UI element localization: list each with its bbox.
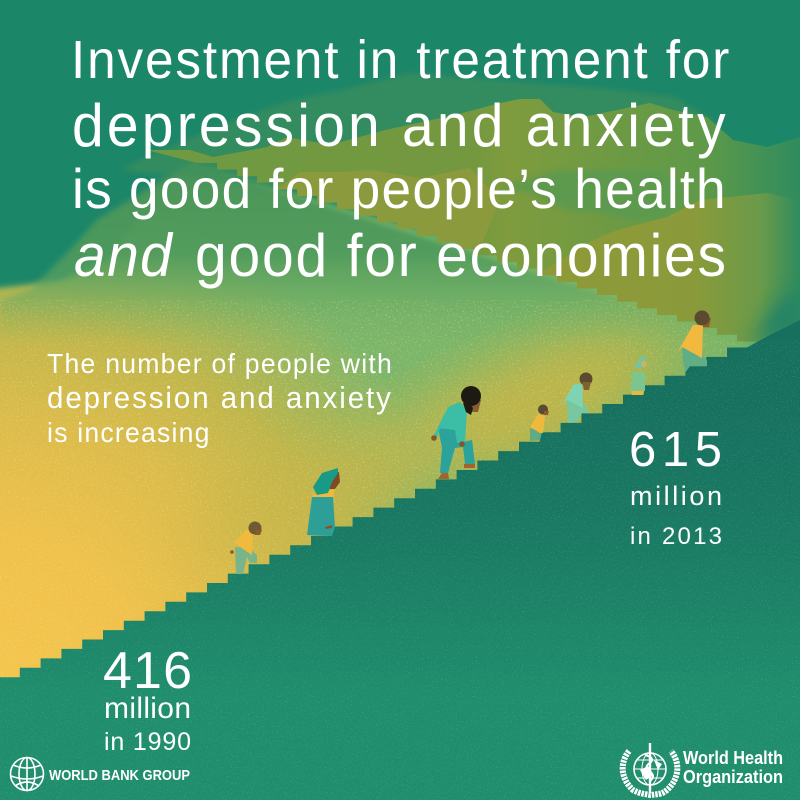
subheading: The number of people with: [47, 347, 392, 379]
title: good for economies: [195, 223, 726, 289]
stat: 416 million in 1990: million: [104, 692, 191, 725]
right dark corner: [750, 285, 800, 345]
figure: bearded man in the middle: [431, 386, 481, 479]
stat: 615 million in 2013: million: [630, 481, 722, 511]
logo: World Health Organization: World Health: [683, 748, 783, 768]
olive band with stepped lower edge: [147, 99, 800, 341]
logo: World Health Organization: [623, 743, 783, 795]
subheading: depression and anxiety: [47, 381, 392, 415]
stat: 416 million in 1990: [103, 642, 192, 756]
stat: 615 million in 2013: [629, 423, 722, 550]
figure: small child on right: [530, 404, 549, 441]
icon: globe: [10, 758, 44, 790]
title: and: [74, 223, 174, 289]
figure: person at top in yellow: [677, 310, 711, 373]
title: [71, 30, 729, 289]
logo: World Bank Group: WORLD BANK GROUP: [49, 768, 190, 784]
logo: World Bank Group: [10, 758, 190, 790]
stat: 416 million in 1990: in 1990: [104, 728, 191, 756]
stat: 416 million in 1990: 416: [103, 642, 192, 700]
icon: WHO emblem: [623, 743, 677, 795]
logo: World Health Organization: Organization: [683, 767, 783, 787]
figure: pale woman on right: [631, 356, 647, 395]
title: is good for people’s health: [72, 158, 726, 220]
green patch under the word health: [500, 170, 690, 220]
figure: woman in scarf: [307, 468, 340, 536]
figure: small child bottom left: [230, 522, 262, 574]
bright olive patch centre: [277, 168, 500, 255]
background sky and glow: [0, 74, 800, 678]
subheading: [47, 347, 392, 448]
stat: 615 million in 2013: in 2013: [630, 523, 722, 550]
title: Investment in treatment for: [71, 30, 729, 90]
title: depression and anxiety: [72, 93, 726, 159]
staircase: [0, 320, 800, 800]
stat: 615 million in 2013: 615: [629, 423, 722, 477]
figure: bearded man on right: [562, 372, 592, 423]
teal upper sky with cloud edge at left: [0, 0, 800, 345]
bright olive patch right: [537, 193, 800, 342]
subheading: is increasing: [47, 416, 209, 448]
mid-green cloud: [120, 73, 720, 190]
green layer below the stepped line: [0, 163, 760, 345]
